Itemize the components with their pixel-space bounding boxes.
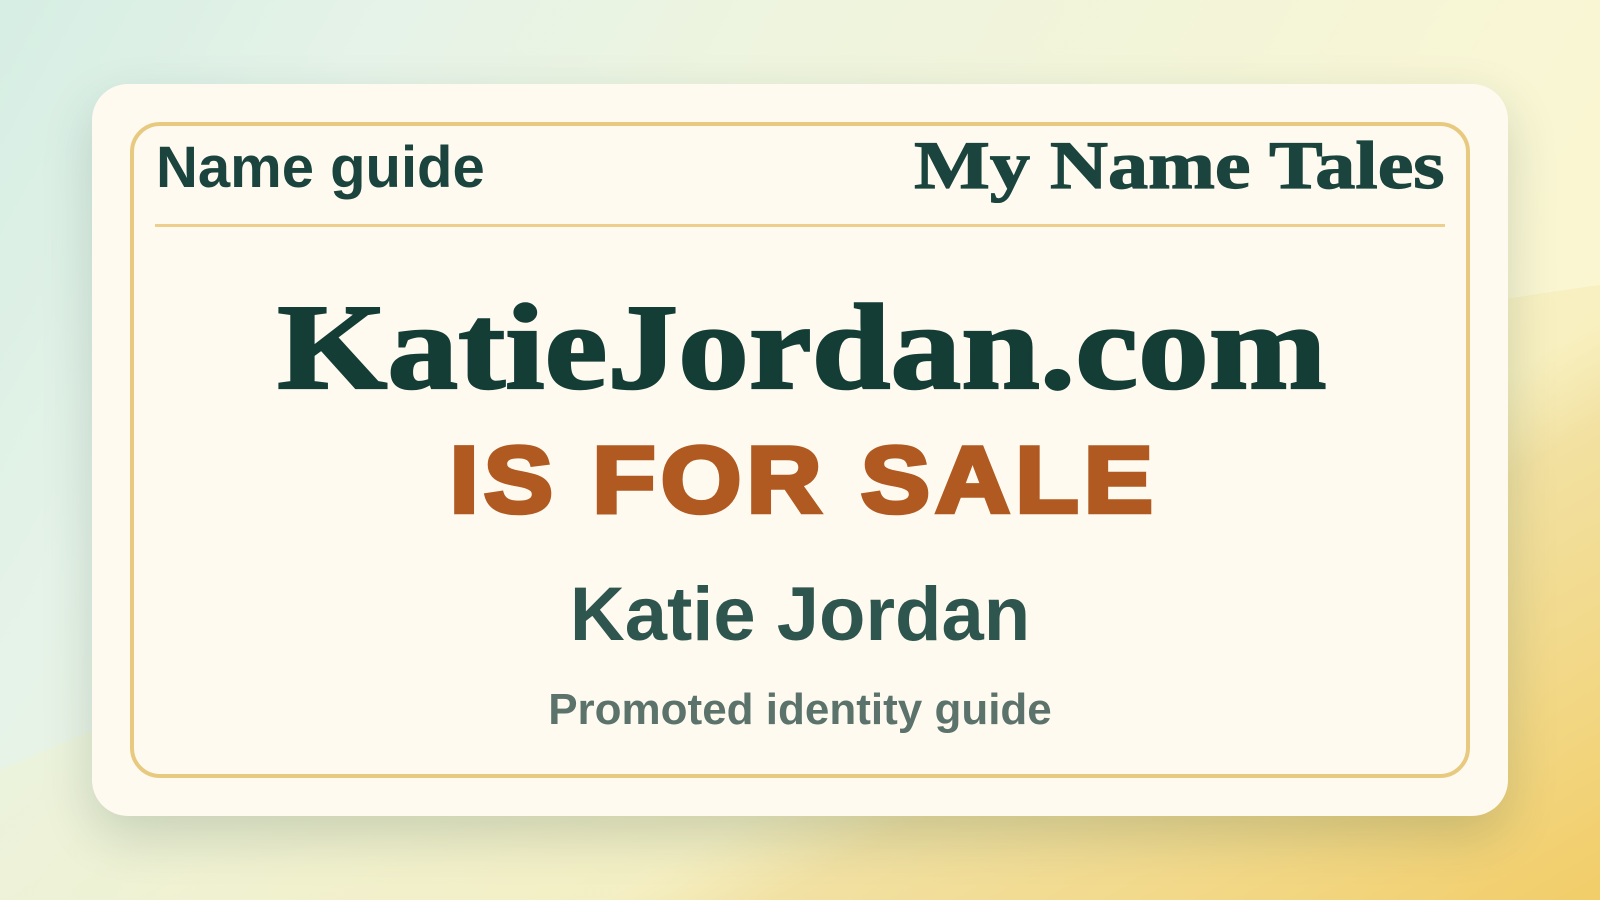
panel: card — [92, 84, 1508, 816]
header label: Name guide — [156, 135, 485, 200]
person name: Katie Jordan — [570, 572, 1030, 657]
brand name: My Name Tales — [915, 127, 1445, 203]
for sale headline: IS FOR SALE — [450, 427, 1158, 532]
divider — [155, 224, 1445, 227]
domain title: KatieJordan.com — [277, 280, 1326, 415]
tagline: Promoted identity guide — [548, 685, 1052, 734]
inner border — [130, 122, 1470, 778]
